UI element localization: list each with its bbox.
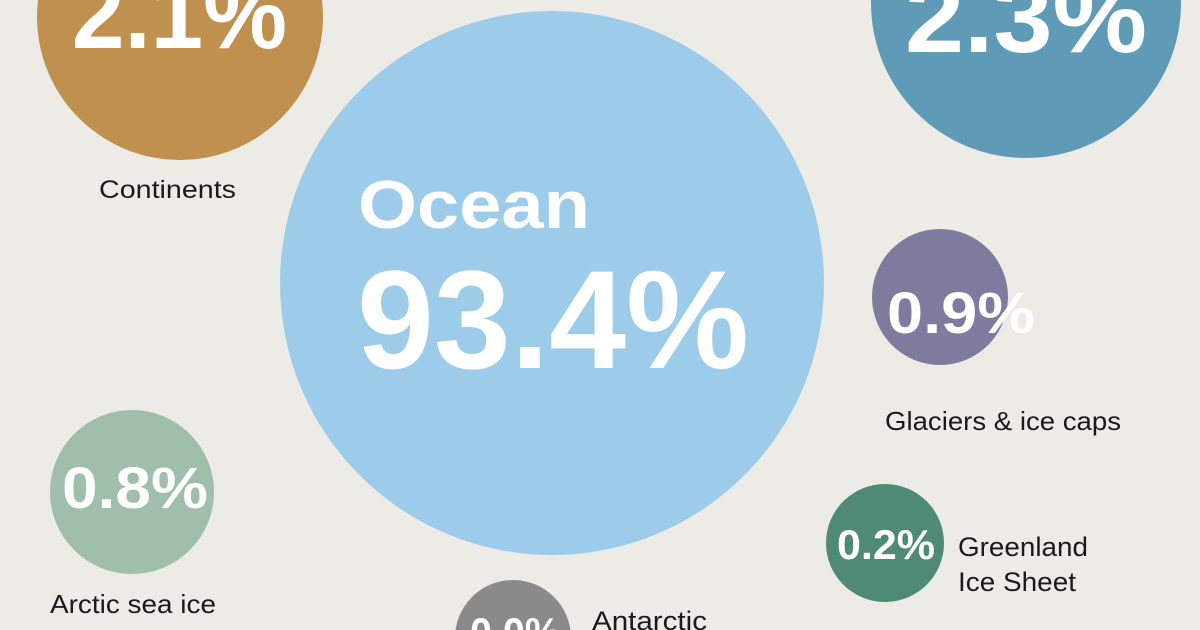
ocean value: 93.4% <box>357 241 749 398</box>
circle: greenland: 0.2% <box>837 521 935 568</box>
label: greenland: Ice Sheet <box>958 567 1077 597</box>
circle: arctic sea ice <box>50 410 214 574</box>
circle: greenland <box>826 484 944 602</box>
label: greenland <box>958 532 1088 597</box>
circle: continents <box>37 0 323 160</box>
ocean heading: Ocean <box>358 167 590 243</box>
label: continents: Continents <box>99 176 236 204</box>
circle: 2.3% <box>871 0 1181 158</box>
label: greenland: Greenland <box>958 532 1088 562</box>
circle: glaciers <box>872 229 1035 365</box>
label: glaciers: Glaciers & ice caps <box>885 406 1121 436</box>
circle: arctic sea ice: 0.8% <box>62 456 208 521</box>
label: arctic: Arctic sea ice <box>50 589 216 619</box>
circle: antarctic <box>455 580 571 630</box>
circle: ocean <box>280 11 824 555</box>
circle: glaciers: 0.9% <box>887 281 1035 346</box>
